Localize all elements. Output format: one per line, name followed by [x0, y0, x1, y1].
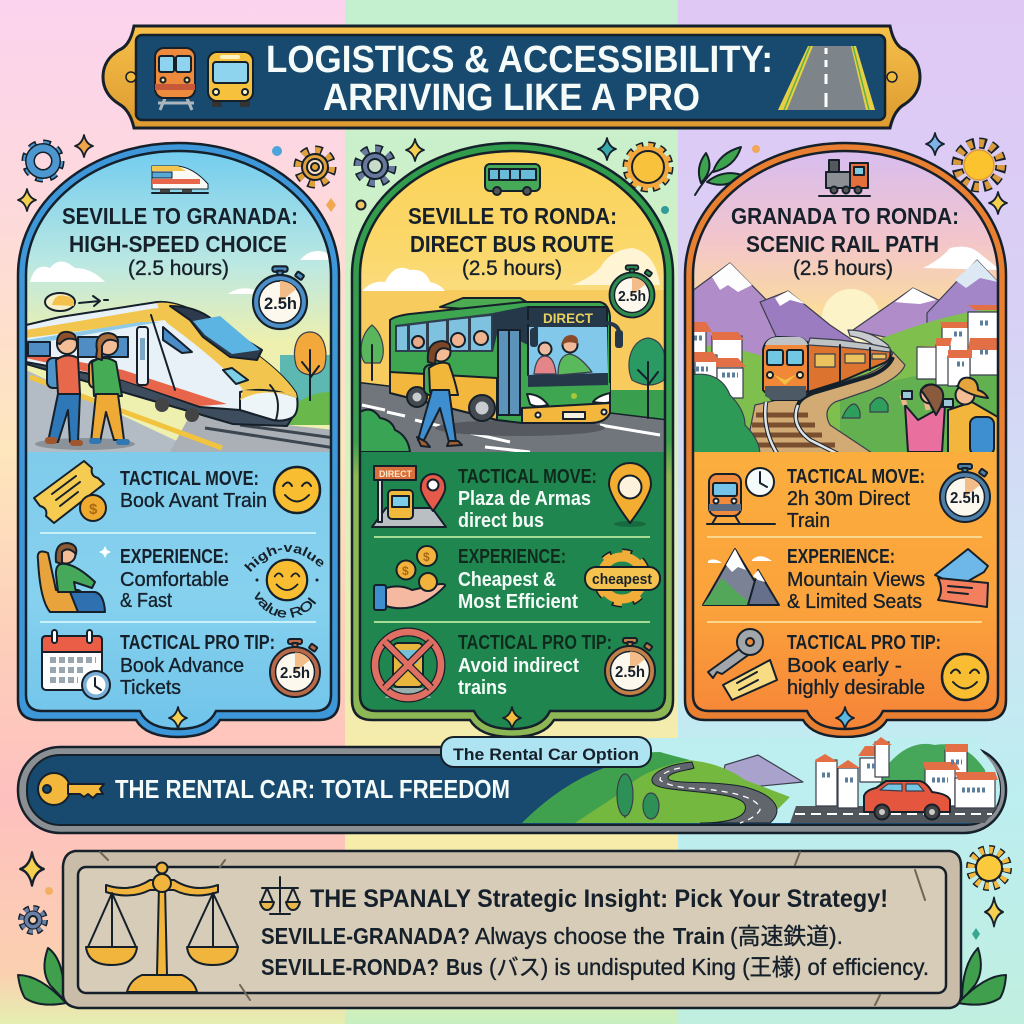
icon: high-value badge: value ROI — [254, 591, 316, 618]
stopwatch: 2.5h — [264, 294, 297, 313]
row: tactical pro tip: Book early - — [787, 654, 902, 677]
row: experience: EXPERIENCE: — [458, 545, 566, 568]
insight line one — [261, 923, 843, 949]
row: experience: & Limited Seats — [787, 590, 922, 613]
icon: key and ticket — [708, 629, 777, 700]
row: tactical move: Train — [787, 509, 830, 532]
insight line two — [261, 954, 929, 980]
icon: hand with coins — [374, 546, 445, 610]
heading: Granada to Ronda — [731, 203, 959, 280]
row: tactical move: 2h 30m Direct — [787, 487, 910, 510]
row: experience: EXPERIENCE: — [120, 545, 229, 568]
icon: bus stop and pin: DIRECT — [379, 469, 412, 480]
row: tactical pro tip: TACTICAL PRO TIP: — [787, 631, 941, 654]
insight line one: SEVILLE-GRANADA? — [261, 923, 470, 949]
train — [763, 330, 892, 400]
scene: direct bus — [355, 145, 670, 737]
small cloud and arrow — [45, 293, 108, 311]
insight line one: Always choose the — [475, 923, 665, 949]
icon: gold pin — [609, 463, 651, 527]
title text — [266, 39, 773, 119]
icon: mountain — [703, 549, 779, 605]
person: woman with backpack — [89, 333, 130, 445]
icon: orange gear — [298, 150, 332, 184]
row: tactical move: TACTICAL MOVE: — [458, 465, 597, 488]
tag: The Rental Car Option — [453, 745, 639, 764]
leaves right — [958, 948, 1006, 1005]
insight line two: Bus — [446, 954, 483, 980]
row: tactical pro tip: Tickets — [120, 676, 181, 699]
village — [815, 737, 998, 808]
panel: Granada to Ronda — [680, 143, 1010, 737]
row: tactical pro tip — [375, 631, 655, 699]
row: tactical move: TACTICAL MOVE: — [120, 467, 259, 490]
icon: slate gear — [22, 909, 44, 931]
heading: Granada to Ronda: SCENIC RAIL PATH — [746, 231, 939, 257]
insight stone plaque — [63, 851, 961, 1008]
row: experience — [374, 545, 660, 613]
row: tactical move — [372, 463, 651, 532]
row: tactical move — [707, 464, 990, 532]
leaves left — [18, 948, 66, 1005]
landscape — [522, 737, 1000, 823]
scene: high speed train — [20, 145, 335, 737]
trees — [842, 404, 860, 418]
bus: DIRECT — [543, 310, 593, 326]
person: man with backpack — [35, 332, 135, 450]
insight line two: (バス) is undisputed King (王様) of efficiency. — [489, 954, 929, 980]
row: experience: & Fast — [120, 589, 172, 612]
row: tactical pro tip — [708, 629, 988, 700]
hills — [694, 310, 997, 431]
icon: road — [778, 46, 875, 110]
icon: sun right — [971, 850, 1007, 886]
insight heading: THE SPANALY Strategic Insight: Pick Your Strategy! — [310, 885, 888, 913]
row: experience — [36, 542, 324, 618]
row: tactical pro tip: TACTICAL PRO TIP: — [120, 631, 275, 654]
icon: orange train — [155, 48, 195, 110]
rail track — [745, 352, 905, 455]
row: experience — [703, 545, 988, 613]
clouds — [30, 251, 335, 294]
mountains — [694, 259, 997, 356]
row: tactical pro tip: TACTICAL PRO TIP: — [458, 631, 612, 654]
icon: balance scale — [86, 862, 238, 992]
icon: bus stop and pin — [372, 466, 446, 527]
row: tactical move: Book Avant Train — [120, 489, 267, 512]
heading: Seville to Ronda: DIRECT BUS ROUTE — [410, 231, 614, 257]
heading: Seville to Granada: (2.5 hours) — [128, 257, 229, 280]
heading: Granada to Ronda: (2.5 hours) — [793, 257, 893, 280]
heading: Granada to Ronda: GRANADA TO RONDA: — [731, 203, 959, 229]
village left — [688, 322, 746, 398]
title banner — [103, 26, 920, 128]
icon: leaves — [695, 147, 742, 195]
row: tactical pro tip: 2.5h — [280, 665, 310, 682]
icon: slate gear — [358, 149, 392, 183]
row: experience: EXPERIENCE: — [787, 545, 895, 568]
scene: scenic rail — [694, 152, 997, 728]
icon: ticket and coin — [34, 461, 106, 523]
icon: cheapest gear badge — [585, 554, 660, 602]
icon: high-value badge — [244, 545, 324, 618]
heading: Seville to Ronda: SEVILLE TO RONDA: — [408, 203, 617, 229]
row: tactical pro tip: Book Advance — [120, 654, 244, 677]
icon: hand with coins: $ — [402, 564, 409, 578]
icon: calendar and clock — [42, 630, 110, 699]
heading: Seville to Ronda: (2.5 hours) — [462, 257, 562, 280]
bush — [360, 410, 410, 452]
insight line two: SEVILLE-RONDA? — [261, 954, 439, 980]
icon: tickets — [935, 549, 988, 607]
stopwatch — [610, 265, 654, 318]
icon: sun — [627, 146, 669, 188]
row: tactical move: Plaza de Armas — [458, 487, 591, 510]
row: tactical pro tip — [42, 630, 320, 699]
heading: Seville to Granada: SEVILLE TO GRANADA: — [62, 203, 298, 229]
icon: train and clock — [707, 468, 775, 524]
row: experience: Cheapest & — [458, 568, 556, 591]
tag — [441, 737, 651, 767]
side decorations — [18, 850, 1007, 1005]
heading: Seville to Ronda — [408, 203, 617, 280]
stopwatch — [253, 266, 307, 329]
row: tactical pro tip: trains — [458, 676, 507, 699]
rental heading: THE RENTAL CAR: TOTAL FREEDOM — [115, 774, 510, 804]
heading: Seville to Granada: HIGH-SPEED CHOICE — [69, 231, 287, 257]
bus — [390, 298, 623, 436]
icon: steam locomotive — [819, 160, 870, 196]
panel: Seville to Ronda — [352, 143, 673, 737]
icon: ticket and coin: $ — [89, 501, 98, 518]
heading: Seville to Granada — [62, 203, 298, 280]
clouds — [362, 248, 660, 291]
row: tactical move: direct bus — [458, 509, 544, 532]
trees — [361, 325, 666, 418]
row: experience: Comfortable — [120, 568, 229, 591]
tourists — [902, 378, 1003, 455]
icon: yellow bus — [208, 52, 253, 107]
row: experience: Most Efficient — [458, 590, 578, 613]
row: tactical pro tip: highly desirable — [787, 676, 925, 699]
icon: seated traveller — [38, 543, 111, 612]
stopwatch: 2.5h — [618, 288, 646, 305]
person: woman walking — [417, 341, 462, 447]
insight line one: (高速鉄道). — [730, 923, 843, 949]
rental car banner — [18, 737, 1006, 833]
train body — [26, 302, 298, 426]
row: experience: Mountain Views — [787, 568, 925, 591]
icon: no trains — [375, 632, 441, 698]
row: tactical pro tip: 2.5h — [615, 664, 645, 681]
icon: high-value badge: high-value — [244, 545, 324, 572]
icon: train — [152, 166, 208, 193]
icon: small scale — [260, 877, 300, 914]
insight line one: Train — [673, 923, 725, 949]
icon: cheapest gear badge: cheapest — [592, 571, 652, 588]
bushes — [690, 374, 760, 455]
icon: key — [38, 773, 104, 805]
village right — [917, 305, 1004, 386]
row: tactical move: 2.5h — [950, 490, 980, 507]
car — [864, 781, 950, 820]
icon: blue gear — [26, 144, 60, 178]
title text: ARRIVING LIKE A PRO — [323, 77, 700, 119]
title text: LOGISTICS & ACCESSIBILITY: — [266, 39, 773, 81]
icon: rayed sun — [957, 143, 1001, 187]
icon: hand with coins: $ — [423, 550, 430, 564]
tree — [295, 332, 326, 400]
row: tactical pro tip: Avoid indirect — [458, 654, 579, 677]
panel: Seville to Granada — [16, 142, 340, 738]
decorations around panels — [18, 133, 1007, 214]
row: tactical move — [34, 461, 320, 523]
row: tactical move: TACTICAL MOVE: — [787, 465, 925, 488]
icon: bus — [485, 164, 540, 195]
